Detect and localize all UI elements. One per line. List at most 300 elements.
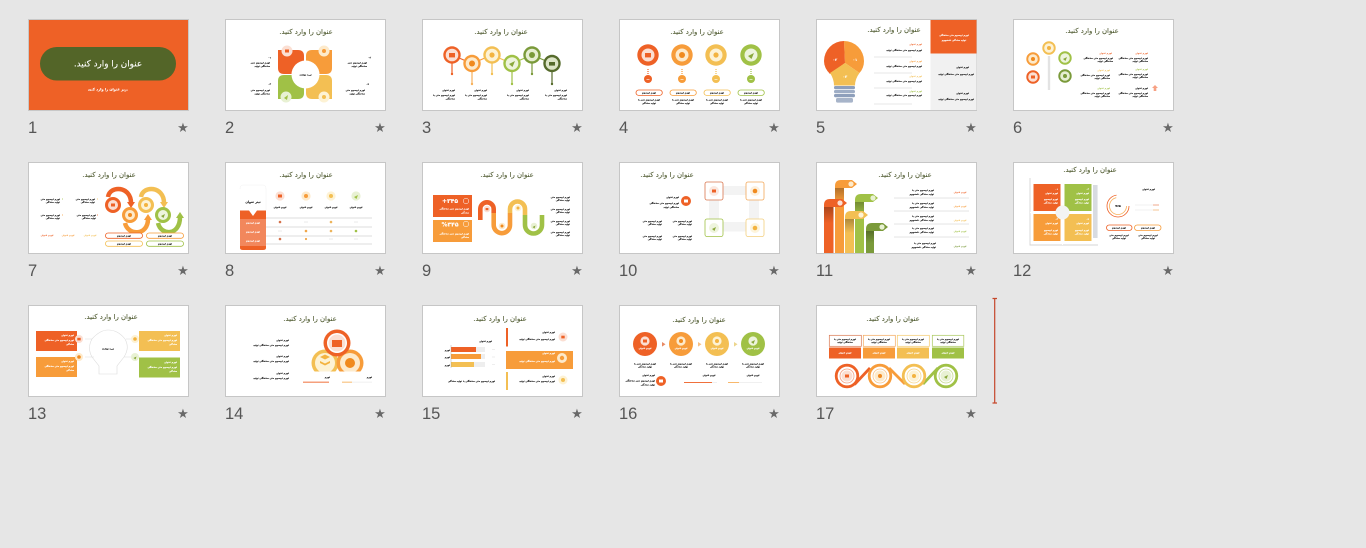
list: لورم عنوان: [542, 375, 555, 378]
text blocks: لورم عنوان: [1097, 87, 1110, 90]
title: عنوان را وارد کنید.: [473, 315, 527, 323]
text blocks: لورم ایپسوم متن با: [742, 362, 764, 366]
text blocks: لورم عنوان: [276, 355, 289, 358]
bar chart: لورم عنوان: [479, 340, 492, 343]
text blocks: لورم عنوان: [1097, 69, 1110, 72]
title: عنوان را وارد کنید.: [672, 316, 726, 324]
outlined boxes: ساختگی تولید: [837, 340, 854, 344]
matrix squares: لورم ایپسوم: [1075, 229, 1089, 232]
pills: لورم ایپسوم: [158, 242, 172, 246]
table: [266, 218, 372, 244]
icons: [75, 335, 139, 361]
icon: arrow up: [1152, 85, 1158, 91]
text blocks: [253, 339, 289, 380]
stat box red: +۳۴۵: [442, 198, 458, 205]
boxes: لورم ایپسوم متن ساختگی: [44, 364, 74, 368]
bulb: ۰۲: [833, 58, 838, 62]
slide number 13: 13: [28, 405, 46, 423]
boxes: سادگی: [169, 342, 178, 346]
boxes: لورم عنوان: [61, 360, 74, 363]
bar chart: [445, 340, 495, 368]
filled boxes: لورم عنوان: [873, 352, 886, 354]
boxes: لورم ایپسوم متن ساختگی: [44, 338, 74, 342]
boxes: لورم عنوان: [164, 361, 177, 364]
text blocks: [1109, 234, 1158, 240]
list: [506, 328, 573, 390]
text blocks: تولید سادگی: [746, 364, 760, 368]
text blocks: ساختگی تولید: [254, 64, 271, 68]
matrix squares: لورم ایپسوم: [1075, 198, 1089, 201]
text blocks: تولید سادگی: [82, 216, 96, 220]
text blocks: ساختگی تولید: [663, 205, 680, 209]
bar chart: لورم: [445, 356, 450, 359]
matrix squares: ۰۲: [1086, 188, 1090, 191]
text blocks: لورم ایپسوم متن: [551, 231, 570, 234]
outlined boxes: لورم ایپسوم متن با: [834, 338, 856, 341]
progress bars: [684, 374, 762, 383]
star 8: ★: [374, 264, 386, 279]
text blocks: [643, 196, 692, 241]
text blocks: لورم عنوان: [41, 234, 54, 237]
text blocks: ساختگی تولید: [1132, 94, 1149, 98]
text blocks: تولید سادگی: [556, 222, 570, 226]
text blocks: لورم عنوان: [666, 196, 679, 199]
slide number 11: 11: [816, 262, 833, 280]
text rows: لورم ایپسوم متن با: [914, 242, 936, 245]
text blocks: تولید سادگی: [648, 237, 662, 241]
matrix squares: لورم عنوان: [1076, 192, 1089, 195]
text blocks: لورم ایپسوم متن با: [670, 362, 692, 366]
slide number 12: 12: [1013, 262, 1031, 280]
snake path: [480, 202, 542, 234]
text rows: لورم عنوان: [954, 205, 967, 208]
stat box red: لورم ایپسوم متن ساختگی: [439, 206, 469, 210]
slide 15: bar chart with list: [422, 306, 582, 396]
star 14: ★: [374, 407, 386, 422]
title: عنوان را وارد کنید.: [867, 26, 921, 34]
progress bars: لورم: [325, 376, 330, 379]
text blocks: لورم ایپسوم متن با: [740, 98, 762, 102]
pills: [106, 233, 184, 246]
slide 9: snake road: [422, 162, 582, 254]
pills: لورم ایپسوم: [642, 92, 656, 94]
side panel: لورم ایپسوم متن ساختگی: [939, 33, 969, 37]
text blocks: لورم ایپسوم متن ساختگی: [1083, 56, 1113, 60]
star 12: ★: [1162, 264, 1174, 279]
ribbon panel: تیتر عنوان: [245, 200, 261, 204]
title: عنوان را وارد کنید.: [474, 28, 528, 36]
hub label: تیره نوشته: [102, 348, 114, 350]
text blocks: [634, 362, 764, 368]
star 9: ★: [571, 264, 583, 279]
text rows: لورم ایپسوم متن ساختگی تولید: [886, 64, 922, 68]
text blocks: تولید سادگی: [678, 222, 692, 226]
text rows: لورم عنوان: [954, 219, 967, 222]
slide 12: matrix: [1014, 162, 1174, 254]
slide 17: four rings with boxes: [816, 306, 976, 396]
axes: [1030, 178, 1098, 245]
text blocks: لورم ایپسوم متن: [673, 235, 692, 238]
circles: [1026, 41, 1072, 84]
process circles: لورم عنوان: [747, 347, 760, 350]
slide number 9: 9: [422, 262, 431, 280]
pills: لورم ایپسوم: [158, 234, 172, 238]
text blocks: تولید سادگی: [710, 101, 724, 105]
arrows: [662, 342, 738, 347]
text blocks: ۰۲: [368, 56, 372, 60]
slide 14: overlapping circles: [226, 306, 386, 396]
slide number 16: 16: [619, 405, 637, 423]
matrix squares: تولید سادگی: [1044, 200, 1058, 204]
text blocks: تولید سادگی: [1112, 236, 1126, 240]
text blocks: تولید سادگی: [556, 210, 570, 214]
text rows: تولید سادگی نامفهوم: [910, 218, 934, 222]
text blocks: ساختگی تولید: [1132, 59, 1149, 63]
column icons: لورم عنوان: [300, 206, 313, 209]
list: لورم عنوان: [542, 331, 555, 334]
text blocks: لورم ایپسوم متن: [1109, 234, 1129, 237]
pills: لورم ایپسوم: [1141, 227, 1155, 230]
text rows: لورم عنوان: [909, 60, 922, 63]
text blocks: لورم عنوان: [442, 89, 455, 92]
list: لورم ایپسوم متن ساختگی تولید: [519, 359, 555, 363]
star 1: ★: [177, 121, 189, 136]
pills: لورم ایپسوم: [710, 92, 724, 94]
pills: لورم ایپسوم: [744, 92, 758, 94]
column icons: لورم عنوان: [350, 206, 363, 209]
text blocks: لورم ایپسوم متن: [41, 198, 60, 201]
text rows: لورم عنوان: [954, 191, 967, 194]
pills: [636, 90, 764, 95]
matrix squares: تولید سادگی: [1044, 232, 1058, 236]
bar chart: لورم: [445, 364, 450, 367]
star 16: ★: [768, 407, 780, 422]
text rows: تولید سادگی نامفهوم: [910, 230, 934, 234]
bulb: ۰۳: [843, 75, 848, 79]
text blocks: لورم عنوان: [276, 372, 289, 375]
boxes: سادگی: [66, 342, 75, 346]
slide number 8: 8: [225, 262, 234, 280]
text blocks: ساختگی تولید: [1097, 59, 1114, 63]
text blocks: لورم ایپسوم متن: [348, 62, 367, 64]
ribbon panel: لورم ایپسوم: [246, 222, 260, 224]
title: عنوان را وارد کنید.: [279, 28, 333, 36]
text blocks: لورم ایپسوم متن ساختگی تولید: [253, 376, 289, 380]
text blocks: ساختگی: [520, 96, 530, 100]
side panel: لورم ایپسوم متن ساختگی تولید: [938, 72, 974, 76]
legend: لورم عنوان: [1142, 188, 1155, 191]
text blocks: [433, 89, 568, 100]
text blocks: تولید سادگی: [46, 200, 60, 204]
text blocks: ساختگی تولید: [254, 92, 271, 96]
text blocks: لورم ایپسوم متن ساختگی تولید: [253, 343, 289, 347]
subtitle: زیر عنوان را وارد کنید.: [88, 88, 128, 92]
text blocks: لورم عنوان: [1099, 52, 1112, 55]
icon with description: لورم عنوان: [642, 374, 655, 377]
text blocks: لورم ایپسوم متن ساختگی: [1118, 72, 1148, 76]
hub outline: [85, 330, 135, 374]
slide number 15: 15: [422, 405, 440, 423]
outlined boxes: [829, 335, 964, 346]
text blocks: لورم عنوان: [554, 89, 567, 92]
outlined boxes: ساختگی تولید: [905, 340, 922, 344]
slide 6: tree of circles: [1014, 20, 1174, 110]
title: عنوان را وارد کنید.: [866, 315, 920, 323]
star 13: ★: [177, 407, 189, 422]
text blocks: ساختگی: [478, 96, 488, 100]
stat box red: سادگی: [461, 210, 470, 214]
matrix squares: لورم عنوان: [1045, 192, 1058, 195]
pins: [443, 46, 561, 85]
matrix squares: ۰۱: [1055, 188, 1058, 191]
wave rings: [836, 365, 957, 387]
text blocks: تولید سادگی: [46, 216, 60, 220]
title: عنوان را وارد کنید.: [670, 28, 724, 36]
star 4: ★: [768, 121, 780, 136]
slide 10: square cycle: [620, 162, 780, 254]
outlined boxes: ساختگی تولید: [940, 340, 957, 344]
text rows: لورم عنوان: [909, 43, 922, 46]
filled boxes: [829, 348, 964, 358]
slide 1: title slide: [28, 20, 188, 110]
slide number 14: 14: [225, 405, 243, 423]
progress bars: لورم: [367, 376, 372, 379]
text blocks: لورم عنوان: [516, 89, 529, 92]
text blocks: ساختگی تولید: [1094, 76, 1111, 80]
text blocks: لورم ایپسوم متن با: [433, 94, 455, 97]
text blocks: تولید سادگی: [648, 222, 662, 226]
text blocks: [1080, 52, 1149, 98]
filled boxes: لورم عنوان: [942, 352, 955, 354]
column icons: لورم عنوان: [325, 206, 338, 209]
column icons: لورم عنوان: [274, 206, 287, 209]
title: عنوان را وارد کنید.: [84, 313, 138, 321]
text rows: لورم عنوان: [909, 90, 922, 93]
slide number 5: 5: [816, 119, 825, 137]
process circles: [633, 332, 765, 356]
slide 5: light bulb: [816, 20, 976, 110]
slide number 3: 3: [422, 119, 431, 137]
text blocks: لورم ایپسوم متن: [551, 196, 570, 199]
text rows: لورم ایپسوم متن ساختگی تولید: [886, 79, 922, 83]
summary text: لورم ایپسوم متن ساختگی با تولید سادگی: [448, 379, 495, 383]
slide number 2: 2: [225, 119, 234, 137]
text blocks: لورم ایپسوم متن: [346, 89, 365, 92]
text blocks: لورم ایپسوم متن با: [706, 98, 728, 102]
ribbon panel: لورم ایپسوم: [246, 240, 260, 242]
slide number 10: 10: [619, 262, 637, 280]
matrix squares: لورم ایپسوم: [1044, 229, 1058, 232]
side bar: [1093, 185, 1098, 238]
list: لورم عنوان: [542, 352, 555, 355]
boxes: سادگی: [169, 369, 178, 373]
list: لورم ایپسوم متن ساختگی تولید: [519, 337, 555, 341]
text rows: تولید سادگی نامفهوم: [910, 192, 934, 196]
text blocks: لورم ایپسوم متن ساختگی: [1080, 73, 1110, 77]
icon: red circle: [681, 196, 691, 206]
text rows: لورم عنوان: [954, 230, 967, 233]
boxes: لورم ایپسوم متن ساختگی: [147, 365, 177, 369]
side panel: لورم عنوان: [956, 66, 969, 69]
text blocks: لورم ایپسوم متن با: [545, 94, 567, 97]
stat box red: [433, 195, 472, 217]
text blocks: تولید سادگی: [1141, 236, 1155, 240]
boxes: [36, 331, 180, 378]
icon with description: تولید سادگی: [641, 382, 655, 386]
text blocks: لورم ایپسوم متن ساختگی: [1118, 91, 1148, 95]
matrix squares: لورم عنوان: [1076, 222, 1089, 225]
stem: [1048, 56, 1050, 90]
stat box orange: سادگی: [461, 235, 470, 239]
text blocks: لورم ایپسوم متن با: [465, 94, 487, 97]
text blocks: لورم عنوان: [1135, 87, 1148, 90]
text blocks: [551, 196, 570, 237]
progress bars: لورم عنوان: [703, 374, 716, 377]
matrix squares: ۰۳: [1055, 218, 1059, 221]
text rows: لورم عنوان: [954, 245, 967, 248]
circles: [307, 330, 367, 380]
slide number 1: 1: [28, 119, 37, 137]
text blocks: لورم ایپسوم متن: [551, 208, 570, 211]
text blocks: تولید سادگی: [556, 233, 570, 237]
ribbon panel: لورم ایپسوم: [246, 230, 260, 234]
text blocks: لورم ایپسوم متن ساختگی: [649, 201, 679, 205]
pills: لورم ایپسوم: [117, 242, 131, 246]
matrix squares: لورم عنوان: [1045, 222, 1058, 225]
matrix squares: لورم ایپسوم: [1044, 198, 1058, 201]
text blocks: لورم عنوان: [474, 89, 487, 92]
star 2: ★: [374, 121, 386, 136]
progress bars: لورم عنوان: [747, 374, 760, 377]
text rows: لورم ایپسوم متن با: [912, 202, 934, 205]
matrix squares: تولید سادگی: [1075, 232, 1089, 236]
connectors: [709, 186, 759, 232]
slide 4: four circles with pills: [620, 20, 780, 110]
matrix squares: تولید سادگی: [1075, 200, 1089, 204]
title: عنوان را وارد کنید.: [279, 171, 333, 179]
text rows: لورم ایپسوم متن با: [912, 227, 934, 230]
star 3: ★: [571, 121, 583, 136]
text rows: تولید سادگی نامفهوم: [912, 245, 936, 249]
legend: [1135, 188, 1159, 210]
star 11: ★: [965, 264, 977, 279]
title: عنوان را وارد کنید.: [74, 60, 142, 70]
process circles: لورم عنوان: [675, 347, 688, 350]
dotted connectors and small circles: [644, 69, 755, 83]
text blocks: ۰۱: [268, 56, 271, 60]
boxes: سادگی: [66, 368, 75, 372]
center label: تیره نوشته: [299, 74, 312, 76]
bulb: [824, 41, 864, 103]
text blocks: لورم ایپسوم متن با: [507, 94, 529, 97]
text blocks: لورم ایپسوم متن با: [638, 98, 660, 102]
text blocks: لورم ایپسوم متن: [1138, 234, 1158, 237]
text blocks: لورم ایپسوم متن با: [706, 362, 728, 366]
slide number 4: 4: [619, 119, 628, 137]
text blocks: ۰۴: [366, 83, 370, 86]
slide 13: central hub with four boxes: [28, 306, 188, 396]
slide 2: four petals: [226, 20, 386, 110]
text blocks: تولید سادگی: [744, 101, 758, 105]
text rows: لورم ایپسوم متن با: [912, 215, 934, 218]
text blocks: لورم ایپسوم متن ساختگی تولید: [253, 359, 289, 363]
text blocks: ساختگی: [446, 96, 456, 100]
text blocks: تولید سادگی: [556, 198, 570, 202]
text blocks: تولید سادگی: [642, 101, 656, 105]
text blocks: لورم ایپسوم متن: [643, 220, 662, 223]
slide 7: circular arrows: [28, 162, 188, 254]
stat box orange: %۳۴۵: [442, 222, 459, 228]
slide 16: process flow: [620, 306, 780, 396]
text blocks: [41, 198, 98, 237]
arrows: [105, 189, 184, 232]
slide 3: pin timeline: [422, 20, 582, 110]
pills: لورم ایپسوم: [117, 234, 131, 238]
title: عنوان را وارد کنید.: [878, 171, 932, 179]
star 5: ★: [965, 121, 977, 136]
circles: [637, 44, 762, 66]
icon with description: لورم ایپسوم متن ساختگی: [625, 378, 655, 382]
text blocks: لورم ایپسوم متن: [41, 214, 60, 217]
text blocks: لورم ایپسوم متن با: [634, 362, 656, 366]
text blocks: لورم ایپسوم متن: [251, 89, 270, 92]
pills: لورم ایپسوم: [676, 92, 690, 94]
arrows: [824, 180, 888, 253]
star 15: ★: [571, 407, 583, 422]
filled boxes: لورم عنوان: [907, 352, 920, 354]
side panel: [930, 20, 976, 110]
insertion cursor: [992, 298, 997, 403]
text rows: لورم ایپسوم متن ساختگی تولید: [886, 93, 922, 97]
text blocks: لورم عنوان: [1135, 68, 1148, 71]
text rows: [874, 43, 922, 104]
outlined boxes: ساختگی تولید: [871, 340, 888, 344]
donut chart: [1107, 195, 1129, 217]
pills: [1106, 225, 1161, 230]
text blocks: ساختگی: [558, 96, 568, 100]
list: لورم ایپسوم متن ساختگی تولید: [519, 379, 555, 383]
title: عنوان را وارد کنید.: [480, 171, 534, 179]
pills: لورم ایپسوم: [1112, 227, 1126, 230]
text rows: تولید سادگی نامفهوم: [910, 205, 934, 209]
text blocks: [251, 56, 372, 96]
side panel: لورم ایپسوم متن ساختگی تولید: [938, 97, 974, 101]
text blocks: لورم ایپسوم متن: [551, 220, 570, 223]
text blocks: لورم ایپسوم متن: [251, 62, 270, 64]
boxes: لورم عنوان: [164, 334, 177, 337]
title: عنوان را وارد کنید.: [82, 171, 136, 179]
star 10: ★: [768, 264, 780, 279]
icon squares: [705, 182, 764, 236]
ribbon panel: [240, 185, 266, 250]
stat box orange: [433, 220, 472, 242]
title pill: [40, 47, 176, 80]
side panel: لورم عنوان: [956, 92, 969, 95]
text blocks: لورم ایپسوم متن: [643, 235, 662, 238]
bar chart: لورم: [445, 349, 450, 352]
text blocks: لورم ایپسوم متن ساختگی: [1118, 56, 1148, 60]
text rows: [894, 189, 969, 249]
title: عنوان را وارد کنید.: [1065, 27, 1119, 35]
text blocks: لورم ایپسوم متن: [76, 198, 95, 201]
text blocks: تولید سادگی: [638, 364, 652, 368]
boxes: لورم عنوان: [61, 334, 74, 337]
text rows: لورم ایپسوم متن با: [912, 189, 934, 192]
text blocks: لورم عنوان: [84, 234, 97, 237]
text blocks: لورم عنوان: [276, 339, 289, 342]
text blocks: تولید سادگی: [674, 364, 688, 368]
filled boxes: لورم عنوان: [839, 352, 852, 354]
